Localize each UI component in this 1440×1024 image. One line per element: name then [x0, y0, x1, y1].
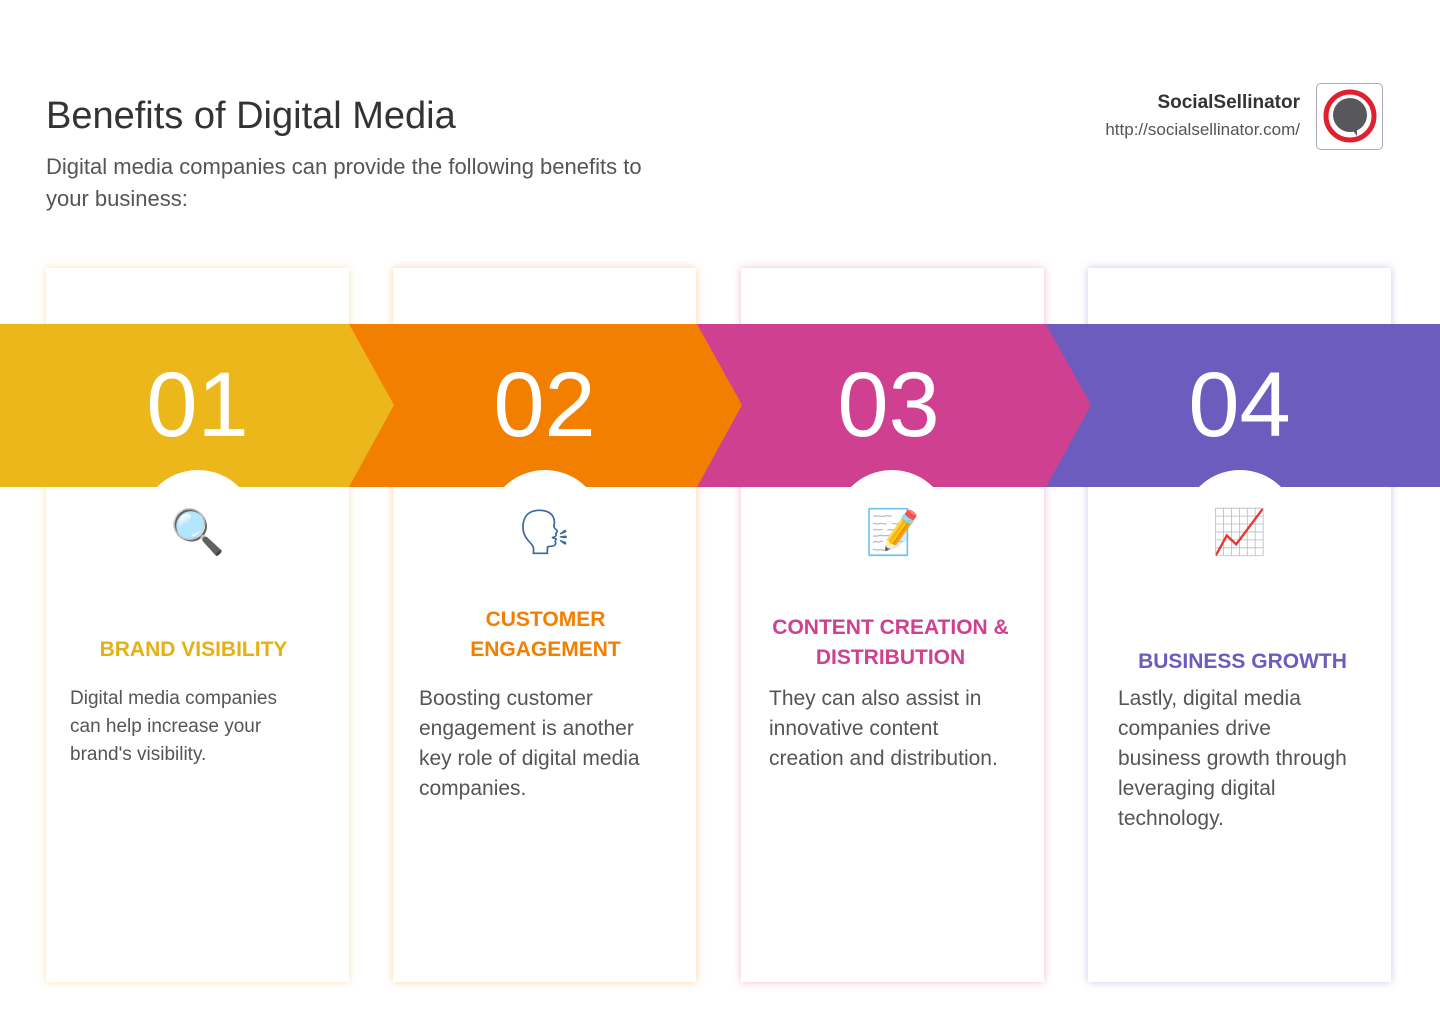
- heading 4: BUSINESS GROWTH: [1138, 650, 1347, 673]
- arrow band: [0, 324, 1440, 487]
- icon: magnifier: 🔍: [170, 507, 225, 558]
- brand url: http://socialsellinator.com/: [1105, 120, 1300, 139]
- text 4: [1118, 687, 1347, 830]
- subtitle: Digital media companies can provide the following benefits to your business:: [46, 154, 642, 211]
- text 4: Lastly, digital media companies drive: [1118, 687, 1301, 740]
- icon: speaking head: 🗣: [517, 507, 572, 558]
- text 2: Boosting customer engagement is another key role of digital media companies.: [419, 687, 640, 800]
- text: 03: [837, 354, 940, 456]
- numbers: 01: [146, 354, 249, 456]
- text 3: They can also assist in innovative content creation and distribution.: [769, 687, 998, 770]
- cards: [46, 268, 349, 982]
- text: 04: [1188, 354, 1291, 456]
- heading 1: BRAND VISIBILITY: [100, 638, 287, 661]
- icon: memo: 📝: [865, 507, 920, 558]
- heading 3: [772, 616, 1009, 669]
- heading 2: CUSTOMER: [486, 608, 605, 631]
- circles: [140, 470, 256, 586]
- heading 2: [470, 608, 621, 661]
- text 1: Digital media companies can help increase your brand's visibility.: [70, 688, 277, 765]
- brand name: SocialSellinator: [1157, 92, 1300, 113]
- title: Benefits of Digital Media: [46, 95, 456, 137]
- text 4: business growth through leveraging digital technology.: [1118, 747, 1347, 830]
- heading 3: CONTENT CREATION &: [772, 616, 1009, 639]
- heading 3: DISTRIBUTION: [816, 646, 965, 669]
- heading 2: ENGAGEMENT: [470, 638, 621, 661]
- icon: chart: 📈: [1212, 507, 1267, 558]
- logo: [1316, 83, 1383, 150]
- text: 02: [493, 354, 596, 456]
